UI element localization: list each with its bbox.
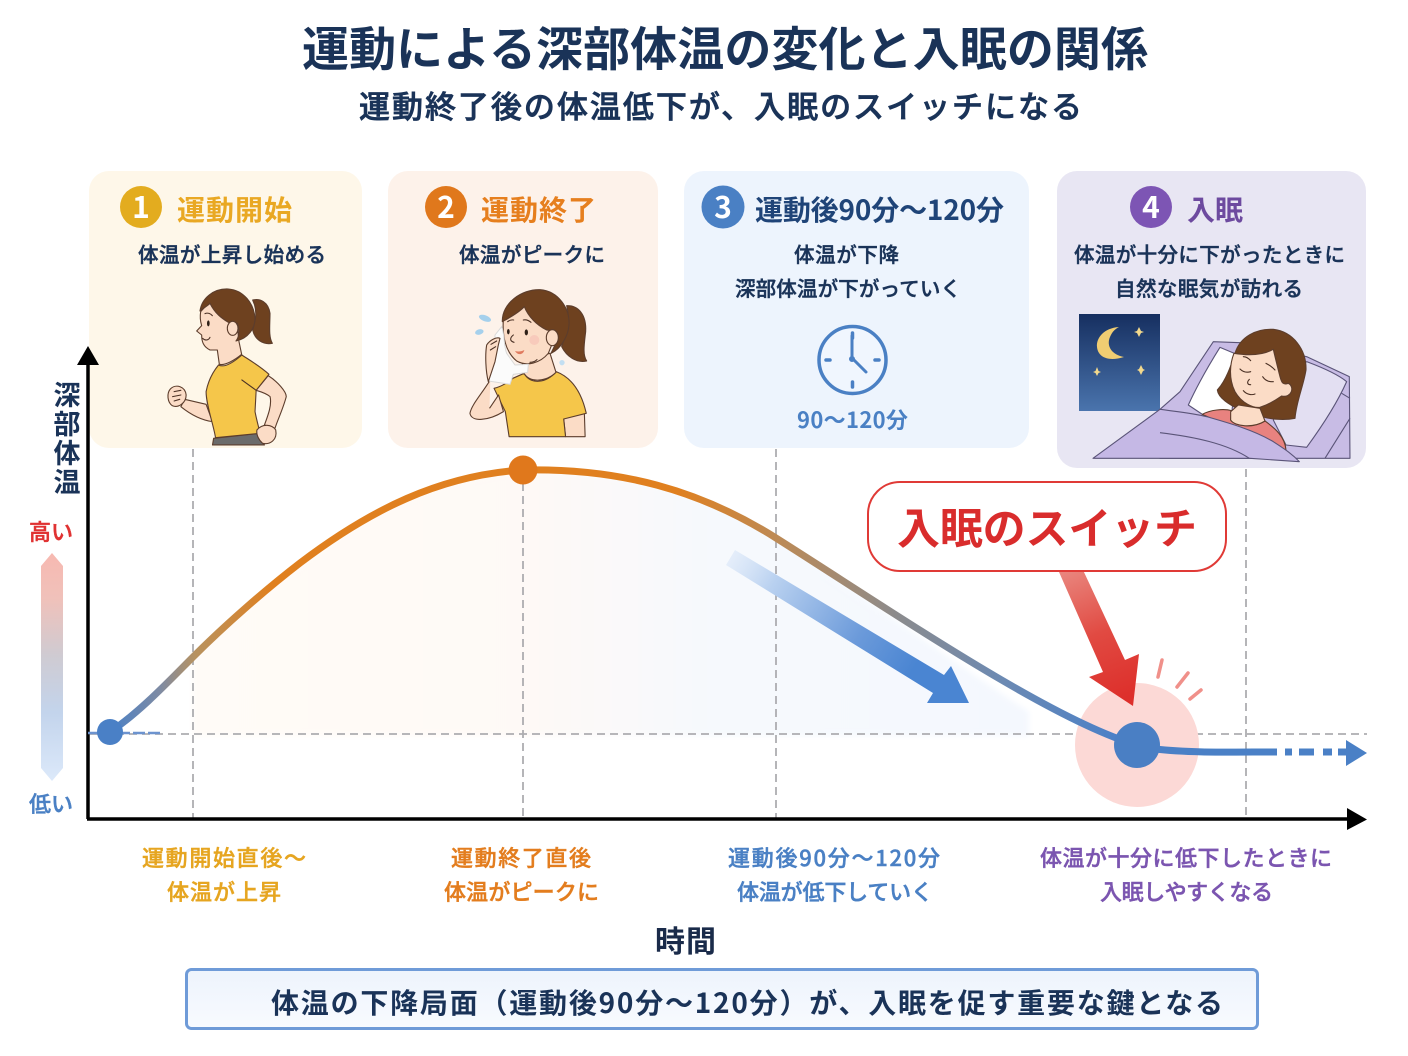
label: high: 高い (29, 515, 73, 547)
temperature scale bar (41, 553, 63, 781)
panel: step 2 exercise end (388, 171, 658, 448)
badge 2 (425, 183, 467, 228)
time label 3 (728, 841, 940, 907)
icon: clock (819, 326, 886, 394)
time label 4: 入眠しやすくなる (1100, 875, 1273, 907)
description (735, 238, 961, 302)
badge 4 (1130, 183, 1172, 228)
time label 2: 運動終了直後 (451, 841, 591, 873)
body temperature curve (88, 470, 1347, 752)
y axis label (54, 374, 80, 500)
sleep onset point (1114, 722, 1160, 768)
panel: step 4 sleep onset (1057, 171, 1366, 468)
time label 1: 体温が上昇 (167, 875, 281, 907)
description (1074, 238, 1345, 302)
blue downward trend arrow (726, 550, 969, 703)
badge 3 (702, 183, 744, 228)
badge 1: 1 (132, 183, 150, 227)
conclusion box (186, 970, 1258, 1028)
badge 1 (120, 183, 162, 228)
chart background tint (193, 470, 1029, 736)
time label 3: 体温が低下していく (737, 875, 933, 907)
heading: 90 to 120 minutes after exercise: 運動後90分〜120分 (755, 189, 1004, 229)
x axis label: 時間 (655, 917, 716, 961)
time label 4 (1040, 841, 1332, 907)
time label 2 (444, 841, 599, 907)
heading: sleep onset: 入眠 (1187, 189, 1243, 229)
label: low: 低い (29, 787, 73, 819)
sparkle ticks (1158, 660, 1201, 699)
grid guide lines (90, 449, 1367, 818)
description: 体温がピークに (459, 238, 605, 268)
highlight glow (1075, 683, 1199, 807)
panel: step 1 exercise start (89, 171, 362, 448)
description: 自然な眠気が訪れる (1115, 272, 1303, 302)
time label 2: 体温がピークに (444, 875, 599, 907)
badge 4: 4 (1142, 183, 1160, 227)
badge 3: 3 (714, 183, 732, 227)
start point (97, 719, 123, 745)
time label 4: 体温が十分に低下したときに (1040, 841, 1332, 873)
y axis label: 部 (54, 403, 80, 442)
badge 2: 2 (437, 183, 455, 227)
callout: sleep switch (868, 482, 1226, 571)
heading: exercise end: 運動終了 (481, 189, 596, 229)
icon: running woman (168, 289, 286, 445)
peak point (508, 456, 538, 484)
time label 1: 運動開始直後〜 (142, 841, 306, 873)
description: 体温が下降 (794, 238, 900, 268)
icon: woman wiping sweat (470, 290, 587, 437)
icon: sleeping woman (1093, 329, 1350, 462)
subtitle: 運動終了後の体温低下が、入眠のスイッチになる (359, 82, 1082, 127)
heading: exercise start: 運動開始 (177, 189, 292, 229)
time label 1 (142, 841, 306, 907)
panel: step 3 after exercise (684, 171, 1029, 448)
y axis label: 深 (54, 374, 80, 413)
y axis label: 体 (54, 432, 80, 471)
clock label: 90〜120分 (797, 403, 908, 435)
callout: sleep switch: 入眠のスイッチ (897, 495, 1197, 557)
x axis (87, 808, 1367, 830)
description: 体温が上昇し始める (138, 238, 326, 268)
red arrow to switch (1059, 570, 1139, 706)
time label 3: 運動後90分〜120分 (728, 841, 940, 873)
description: 体温が十分に下がったときに (1074, 238, 1345, 268)
title: 運動による深部体温の変化と入眠の関係 (302, 11, 1148, 80)
tail arrow head (1346, 740, 1367, 766)
description: 深部体温が下がっていく (735, 272, 961, 302)
icon: night window (1079, 314, 1160, 411)
conclusion box: 体温の下降局面（運動後90分〜120分）が、入眠を促す重要な鍵となる (271, 982, 1223, 1022)
y axis label: 温 (54, 461, 80, 500)
y axis (77, 346, 99, 819)
